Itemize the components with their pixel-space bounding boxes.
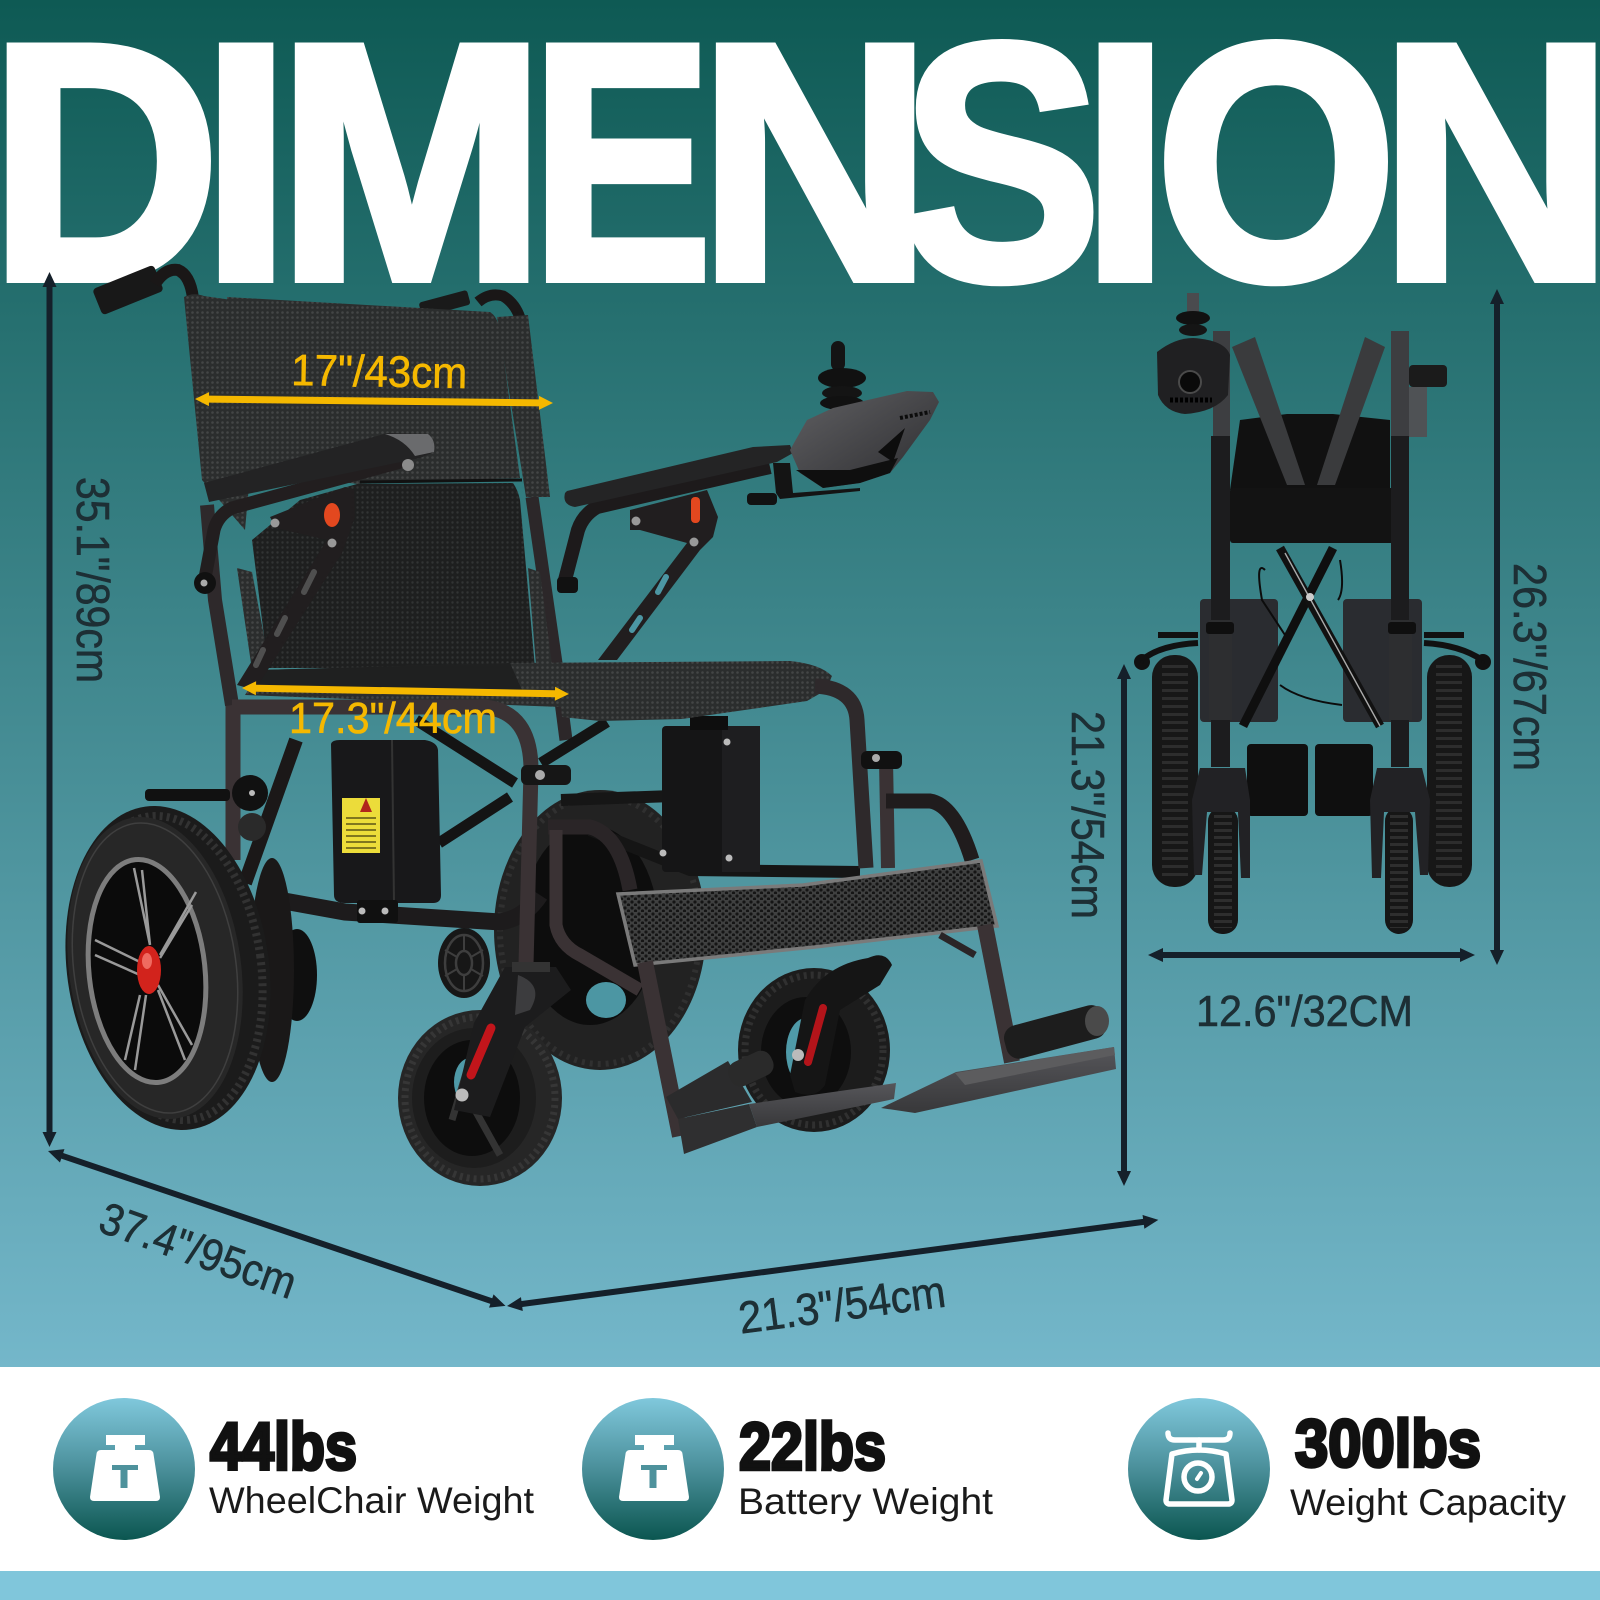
rear brake lever xyxy=(145,775,268,841)
rear wheels xyxy=(1152,655,1472,887)
arrow: overall height xyxy=(42,272,56,1147)
near caster fork xyxy=(454,962,571,1117)
caster forks xyxy=(1192,768,1430,878)
near rear motor xyxy=(250,858,317,1082)
arrow: backrest width xyxy=(195,392,553,410)
frame posts xyxy=(1206,331,1416,767)
footrest bars xyxy=(1137,635,1488,667)
icon: scale xyxy=(1128,1398,1270,1540)
label: seat height: 21.3"/54cm xyxy=(1062,711,1114,919)
label: backrest width: 17"/43cm xyxy=(291,346,468,398)
arrow: overall length xyxy=(46,1144,508,1312)
label: seat width: 17.3"/44cm xyxy=(289,694,497,743)
arrow: folded height xyxy=(1490,289,1504,965)
value: 22lbs xyxy=(739,1410,886,1484)
motors xyxy=(1247,744,1373,816)
stat: wheelchair weight xyxy=(53,1398,535,1540)
arrow: overall width xyxy=(506,1213,1159,1313)
value: 44lbs xyxy=(210,1410,357,1484)
rear frame posts and cross braces xyxy=(233,497,860,922)
panel: stats background xyxy=(0,1367,1600,1571)
label: overall length: 37.4"/95cm xyxy=(93,1192,303,1309)
near caster wheel xyxy=(398,1010,562,1186)
arrow: seat height xyxy=(1117,664,1131,1186)
strap xyxy=(1230,488,1397,543)
title xyxy=(0,0,1600,351)
folded wheelchair front view xyxy=(1137,293,1488,934)
warning label xyxy=(342,798,380,853)
arrow: folded width xyxy=(1148,948,1475,962)
label: folded height: 26.3"/67cm xyxy=(1504,563,1556,771)
label: overall height: 35.1"/89cm xyxy=(67,477,119,683)
folded seat back and side panels xyxy=(1230,337,1390,490)
batteries xyxy=(1200,599,1422,722)
icon: weight xyxy=(53,1398,195,1540)
right armrest stub xyxy=(1409,365,1447,437)
value: 300lbs xyxy=(1295,1406,1481,1482)
far caster wheel xyxy=(738,955,892,1132)
wheelchair side view xyxy=(45,265,1116,1186)
icon: weight xyxy=(582,1398,724,1540)
arrow: seat width xyxy=(242,681,569,701)
stat: weight capacity xyxy=(1128,1398,1566,1540)
far rear wheel xyxy=(494,790,706,1070)
calf strap xyxy=(618,861,997,965)
handle grips xyxy=(92,265,520,318)
backrest xyxy=(184,294,552,670)
cross braces xyxy=(1243,548,1380,726)
motor cap xyxy=(438,928,490,998)
right battery xyxy=(660,716,760,872)
left frame and seat tube xyxy=(207,505,972,990)
right foot plate xyxy=(881,1002,1116,1113)
caption: Battery Weight xyxy=(738,1481,994,1522)
near rear wheel xyxy=(45,793,291,1143)
joystick controller xyxy=(1157,293,1230,414)
left battery xyxy=(331,740,441,923)
stat: battery weight xyxy=(582,1398,994,1540)
label: overall width: 21.3"/54cm xyxy=(736,1266,948,1343)
footrest legs xyxy=(645,925,1012,1136)
bottom band xyxy=(0,1571,1600,1600)
right armrest and joystick controller xyxy=(557,341,939,660)
caption: WheelChair Weight xyxy=(209,1480,535,1521)
seat cushion xyxy=(245,661,832,721)
label: folded width: 12.6"/32CM xyxy=(1196,987,1413,1036)
left armrest with folding bracket xyxy=(194,433,434,690)
left foot plate xyxy=(666,1047,896,1154)
caption: Weight Capacity xyxy=(1290,1482,1566,1523)
front casters xyxy=(1208,807,1413,934)
